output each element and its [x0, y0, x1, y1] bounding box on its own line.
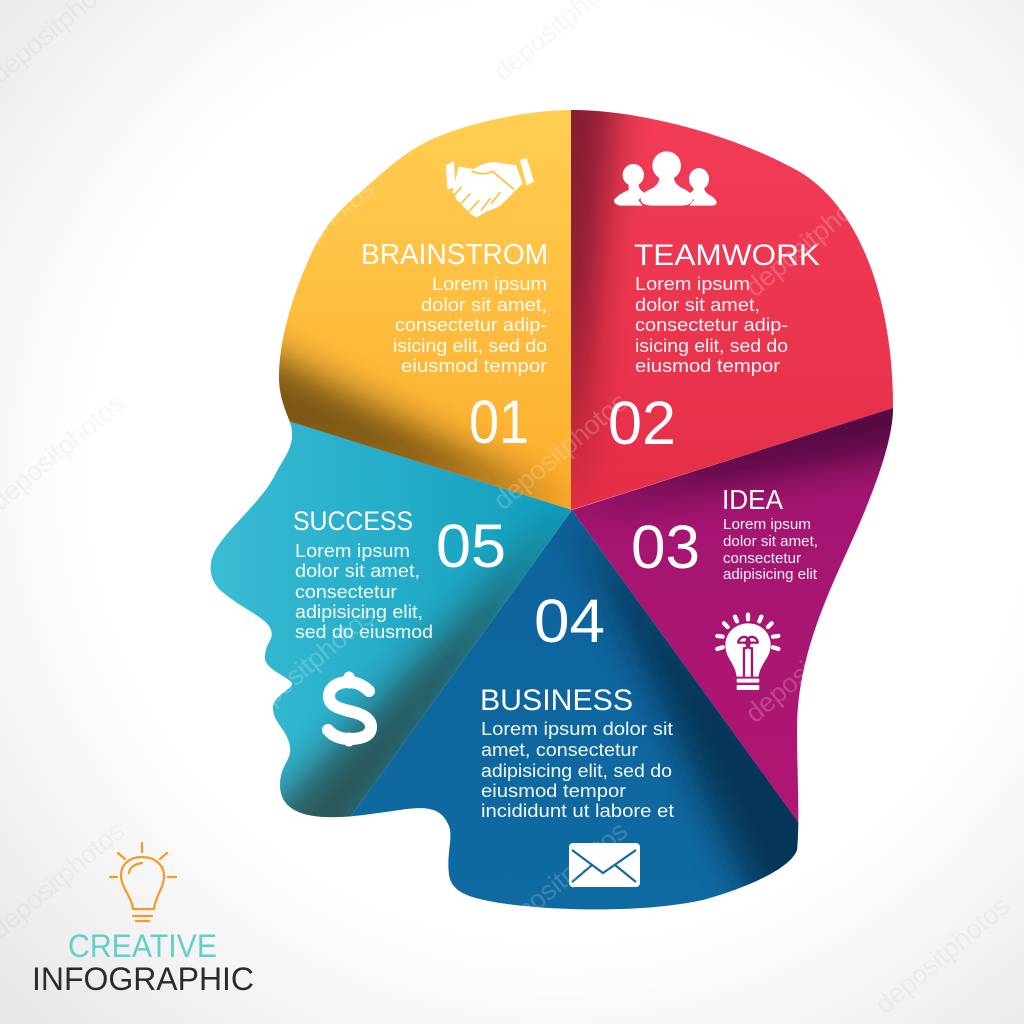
text block: idea body: consectetur — [723, 551, 801, 567]
heading: success: SUCCESS — [293, 506, 413, 536]
panel: 04 business — [350, 510, 798, 910]
text block: brainstrom body: Lorem ipsum — [432, 273, 547, 294]
number 05: 05 — [436, 512, 506, 580]
text block: teamwork body: dolor sit amet, — [635, 294, 760, 315]
text block: business body — [481, 718, 674, 821]
text block: idea body: Lorem ipsum — [723, 517, 811, 533]
text block: success body: sed do eiusmod — [295, 621, 433, 642]
heading: infographic: INFOGRAPHIC — [32, 961, 254, 997]
panel shape: blue — [350, 510, 798, 910]
text block: success body: dolor sit amet, — [295, 560, 420, 581]
watermarks: depositphotos — [488, 816, 633, 945]
text block: brainstrom body: dolor sit amet, — [421, 294, 547, 315]
text block: idea body: adipisicing elit — [723, 567, 817, 583]
text block: idea body: dolor sit amet, — [723, 534, 818, 550]
text block: success body: adipisicing elit, — [295, 601, 423, 622]
text block: business body: adipisicing elit, sed do — [481, 760, 672, 781]
text block: teamwork body: Lorem ipsum — [635, 273, 750, 294]
text block: teamwork body: isicing elit, sed do — [635, 335, 788, 356]
heading: creative: CREATIVE — [68, 928, 217, 964]
watermarks: depositphotos — [488, 387, 633, 516]
watermarks: depositphotos — [870, 891, 1015, 1020]
watermarks: depositphotos — [235, 601, 380, 730]
text block: business body: incididunt ut labore et — [481, 800, 674, 821]
text block: brainstrom body: eiusmod tempor — [401, 355, 547, 376]
panel: 05 success — [210, 422, 572, 818]
text block: teamwork body — [635, 273, 788, 376]
text block: business body: Lorem ipsum dolor sit — [481, 718, 673, 739]
number 02: 02 — [608, 389, 676, 457]
panel shape: red — [571, 110, 893, 510]
text block: success body — [295, 540, 433, 642]
icon: light bulb — [717, 615, 778, 690]
watermarks: depositphotos — [740, 600, 885, 729]
text block: idea body — [723, 517, 818, 583]
text block: business body: amet, consectetur — [481, 739, 638, 760]
text block: brainstrom body — [393, 273, 547, 376]
logo: creative infographic — [32, 843, 254, 997]
icon: handshake — [446, 158, 534, 217]
panel shape: yellow — [279, 110, 572, 510]
icon: envelope — [569, 843, 640, 887]
heading: business: BUSINESS — [480, 684, 633, 717]
icon: dollar sign — [328, 677, 371, 741]
panel shape: purple — [572, 408, 893, 822]
heading: teamwork: TEAMWORK — [634, 239, 820, 272]
icon: team of people — [614, 151, 717, 206]
text block: success body: Lorem ipsum — [295, 540, 410, 561]
text block: brainstrom body: isicing elit, sed do — [393, 335, 547, 356]
heading: idea: IDEA — [722, 484, 783, 515]
number 01: 01 — [469, 388, 529, 456]
text block: teamwork body: consectetur adip- — [635, 314, 788, 335]
panel: 03 idea — [572, 408, 893, 822]
text block: business body: eiusmod tempor — [481, 780, 626, 801]
text block: teamwork body: eiusmod tempor — [635, 355, 780, 376]
heading: brainstrom: BRAINSTROM — [361, 239, 548, 271]
panel shape: cyan — [210, 422, 572, 818]
watermarks: depositphotos — [740, 174, 885, 303]
text block: success body: consectetur — [295, 581, 397, 602]
panel: 01 brainstrom — [279, 110, 572, 510]
watermarks: depositphotos — [235, 174, 380, 303]
number 04: 04 — [534, 587, 605, 655]
panel: 02 teamwork — [571, 110, 893, 510]
text block: brainstrom body: consectetur adip- — [395, 314, 547, 335]
number 03: 03 — [631, 513, 700, 581]
icon: outlined light bulb — [110, 843, 176, 921]
